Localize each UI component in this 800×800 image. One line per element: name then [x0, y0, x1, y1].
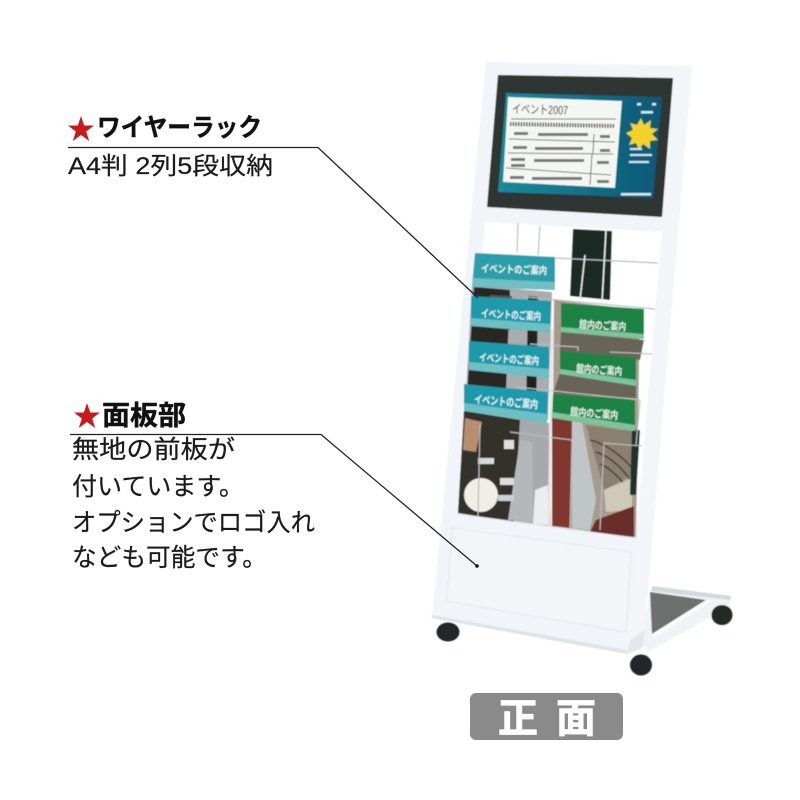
- stand front board: [432, 62, 692, 654]
- brochure: teal 3: イベントのご案内: [479, 351, 539, 368]
- brochure: teal 4: [464, 384, 548, 423]
- product: display stand: [432, 62, 732, 676]
- callout: wire rack: [68, 114, 478, 298]
- brochure: green 2: [560, 351, 636, 386]
- wire rack heading: ワイヤーラック: [97, 114, 262, 142]
- star icon: [74, 403, 100, 428]
- wire rack: [458, 222, 662, 537]
- front panel heading: 面板部: [102, 401, 186, 431]
- photo: city street: [458, 285, 552, 526]
- brochure: green 2: 館内のご案内: [576, 362, 623, 378]
- badge: front view: 正: [498, 697, 538, 741]
- brochure: green 1: [561, 303, 644, 339]
- front panel plate: [432, 514, 636, 654]
- brochure: green 3: 館内のご案内: [570, 405, 619, 422]
- notice sheet: [503, 97, 622, 188]
- brochure: teal 3: [469, 341, 549, 378]
- support post: [570, 229, 612, 300]
- rear caster: [712, 605, 732, 625]
- left caster: [436, 622, 460, 642]
- display screen: [487, 75, 673, 217]
- wire grid: [478, 223, 658, 530]
- front panel description: なども可能です。: [72, 544, 267, 572]
- front panel description: 無地の前板が: [72, 436, 235, 464]
- brochure: green 1: 館内のご案内: [579, 318, 626, 333]
- rack opening: [458, 222, 662, 537]
- brochure: teal 2: [471, 296, 551, 332]
- notice table: [506, 119, 616, 185]
- side panel text marks: [621, 103, 656, 196]
- brochure: teal 2: イベントのご案内: [481, 307, 541, 323]
- brochure: teal 4: イベントのご案内: [474, 392, 539, 412]
- front panel description: オプションでロゴ入れ: [72, 509, 315, 537]
- front caster: [630, 654, 652, 676]
- brochure: teal 1: イベントのご案内: [481, 262, 547, 277]
- front panel description: 付いています。: [72, 473, 244, 501]
- badge: front view: [470, 693, 623, 741]
- front panel leader line: [70, 434, 477, 566]
- brochure: teal 1: [472, 253, 555, 290]
- wire rack leader line: [68, 148, 478, 298]
- star icon: [68, 116, 94, 141]
- wire rack description: A4判 2列5段収納: [68, 153, 273, 180]
- badge: front view: 面: [556, 697, 596, 741]
- front panel description: [72, 436, 315, 572]
- sun icon: [626, 118, 658, 150]
- leader dot: [475, 564, 479, 568]
- callout: front panel: [70, 401, 479, 572]
- notice title: イベント2007: [512, 102, 569, 117]
- base frame: [641, 586, 731, 652]
- brochure: green 3: [552, 394, 635, 431]
- photo: arcade street: [552, 300, 644, 537]
